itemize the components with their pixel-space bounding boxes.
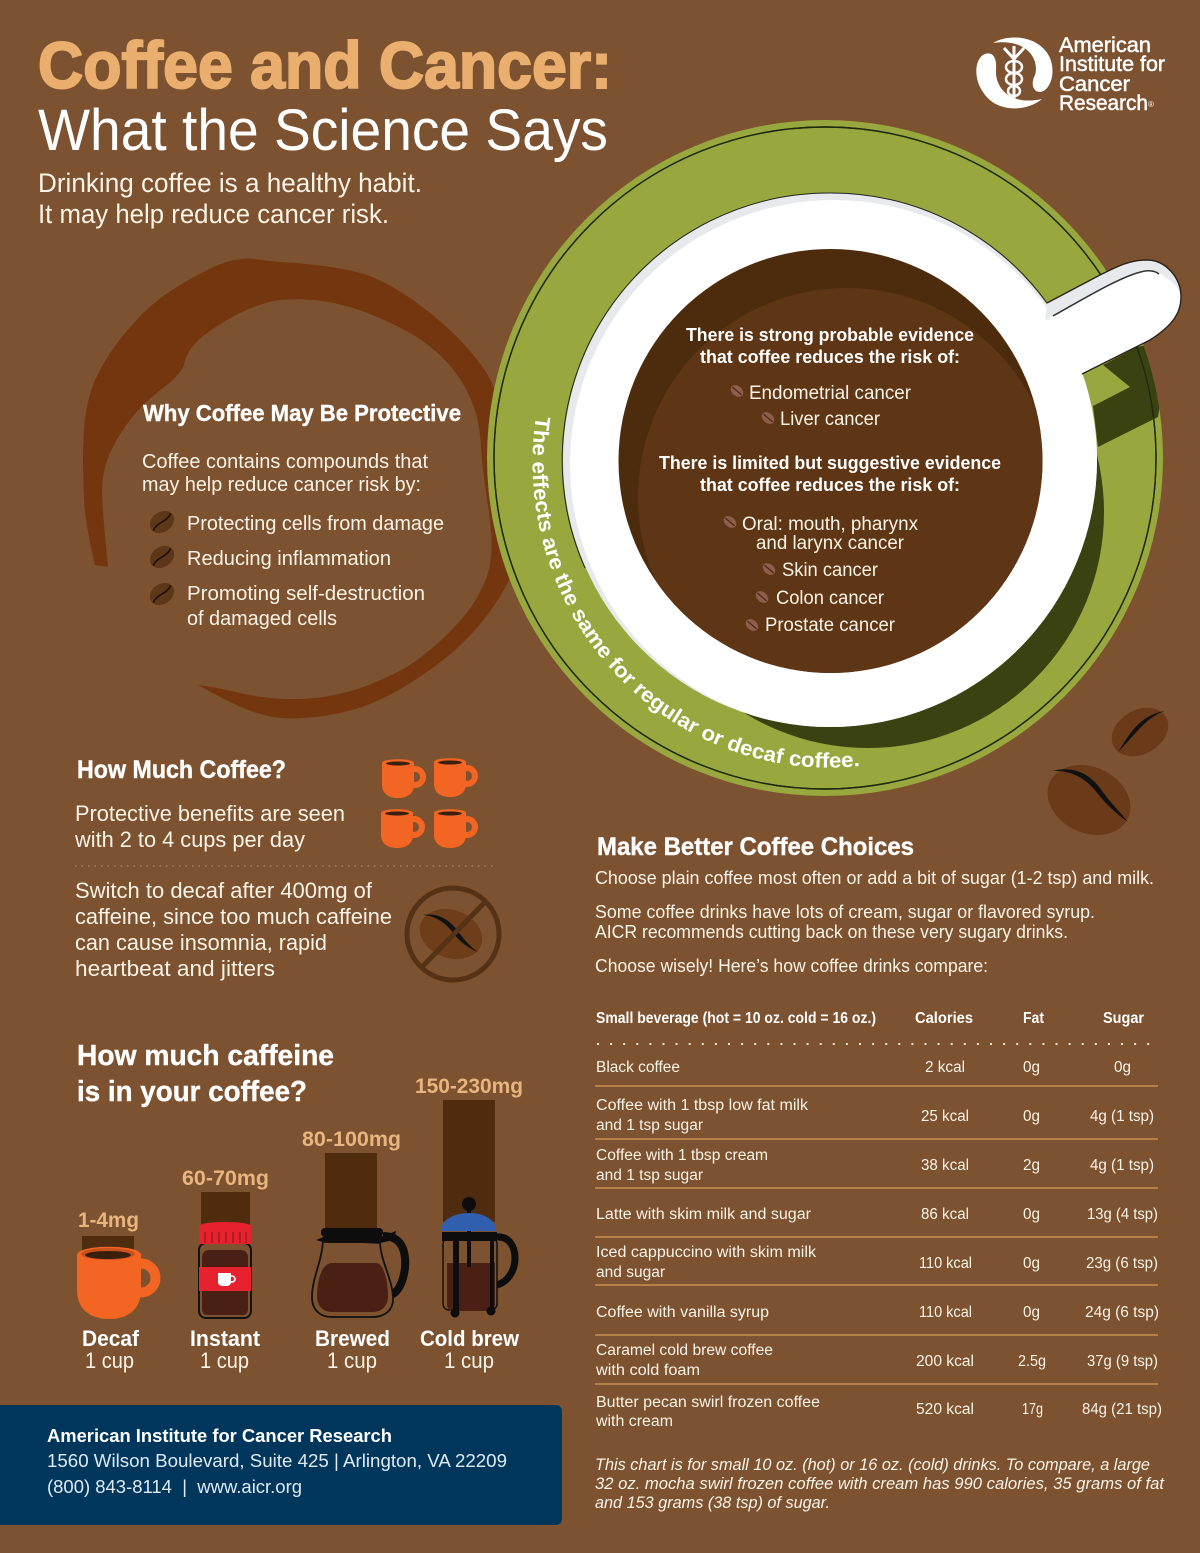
row: cream: 4g (1 tsp): [1090, 1157, 1154, 1174]
icon: decaf mug: [77, 1247, 156, 1319]
logo: American Institute for Cancer Research: American: [1059, 34, 1151, 57]
labels: drink names: Decaf: [82, 1326, 140, 1351]
title: What the Science Says: [38, 98, 608, 163]
row: black coffee: [596, 1059, 1131, 1076]
coffee surface: [618, 249, 1042, 673]
heading: limited evidence: [659, 452, 1001, 495]
row: caramel cold brew: with cold foam: [595, 1362, 700, 1379]
intro text: [38, 168, 422, 229]
text: advice: [595, 867, 1154, 976]
title: Coffee and Cancer:: [38, 28, 612, 102]
text: advice: Some coffee drinks have lots of cream, sugar or flavored syrup.: [595, 901, 1095, 922]
heading: strong evidence: [686, 324, 974, 367]
labels: drink names: 1 cup: [444, 1348, 494, 1373]
panel: why coffee may be protective: [142, 400, 461, 630]
logo: American Institute for Cancer Research: ®: [1148, 100, 1154, 109]
note: chart footnote: [595, 1456, 1165, 1512]
intro text: Drinking coffee is a healthy habit.: [38, 168, 422, 198]
text: advice: Choose wisely! Here’s how coffee drinks compare:: [595, 955, 988, 976]
heading: how much caffeine: is in your coffee?: [77, 1076, 307, 1108]
row: low fat milk: 0g: [1023, 1108, 1040, 1125]
bullet list: protective effects: Promoting self-destruction: [187, 582, 425, 605]
table: coffee drink comparison: [595, 1010, 1162, 1430]
icon: four orange mugs: [381, 758, 475, 848]
text: protective benefits: Protective benefits are seen: [75, 801, 345, 826]
title: [38, 28, 612, 163]
row: butter pecan: 520 kcal: [916, 1401, 974, 1418]
labels: drink names: 1 cup: [200, 1348, 249, 1373]
row: latte: [596, 1206, 1158, 1223]
intro text: It may help reduce cancer risk.: [38, 199, 389, 229]
list: strong evidence cancers: Endometrial cancer: [749, 383, 912, 404]
heading: limited evidence: There is limited but suggestive evidence: [659, 452, 1001, 473]
cup handle: [1030, 260, 1181, 380]
labels: drink names: 1 cup: [85, 1348, 134, 1373]
logo: American Institute for Cancer Research: Research: [1059, 92, 1148, 115]
row: iced cappuccino: Iced cappuccino with skim milk: [596, 1244, 816, 1261]
row: black coffee: 0g: [1114, 1059, 1131, 1076]
row: latte: 13g (4 tsp): [1087, 1206, 1158, 1223]
text: switch to decaf: Switch to decaf after 400mg of: [75, 878, 373, 903]
icon: instant coffee jar: [199, 1222, 251, 1318]
list: limited evidence cancers: Skin cancer: [782, 560, 879, 581]
bullet list: protective effects: of damaged cells: [187, 607, 337, 630]
labels: drink names: Brewed: [315, 1326, 390, 1351]
curved caption on saucer: The effects are the same for regular or decaf coffee.: [532, 418, 859, 768]
row: low fat milk: and 1 tsp sugar: [596, 1117, 703, 1134]
icon: no coffee bean: [407, 888, 499, 980]
list: limited evidence cancers: [721, 514, 918, 636]
bullet list: protective effects: Protecting cells from damage: [187, 512, 444, 535]
heading: strong evidence: There is strong probable evidence: [686, 324, 974, 345]
note: chart footnote: and 153 grams (38 tsp) of sugar.: [595, 1494, 830, 1512]
table header: Small beverage (hot = 10 oz. cold = 16 oz.): [596, 1010, 876, 1027]
row: vanilla syrup: Coffee with vanilla syrup: [596, 1304, 769, 1321]
caffeine amounts: 1-4mg: [78, 1209, 139, 1232]
table header: Sugar: [1103, 1010, 1144, 1027]
text: protective benefits: [74, 801, 345, 852]
row: iced cappuccino: 0g: [1023, 1255, 1040, 1272]
table header: [596, 1010, 1144, 1027]
list: limited evidence cancers: Oral: mouth, pharynx: [742, 514, 918, 535]
row: low fat milk: [596, 1097, 1154, 1134]
row: vanilla syrup: 24g (6 tsp): [1085, 1304, 1159, 1321]
text: advice: AICR recommends cutting back on these very sugary drinks.: [595, 921, 1068, 942]
row: butter pecan: Butter pecan swirl frozen coffee: [596, 1394, 820, 1411]
row: black coffee: Black coffee: [596, 1059, 680, 1076]
row: low fat milk: 25 kcal: [921, 1108, 969, 1125]
footer: contact panel: [0, 1405, 562, 1525]
intro text: compounds: [142, 450, 428, 496]
heading: better choices: Make Better Coffee Choices: [597, 833, 914, 861]
panel: evidence text in cup: [659, 324, 1001, 636]
cup shadow: [494, 127, 1170, 789]
labels: drink names: Instant: [190, 1326, 261, 1351]
row: black coffee: 0g: [1023, 1059, 1040, 1076]
icon: brewed carafe: [312, 1228, 405, 1317]
row: butter pecan: with cream: [595, 1413, 673, 1430]
heading: why coffee: Why Coffee May Be Protective: [143, 400, 461, 426]
bullet list: protective effects: Reducing inflammation: [187, 547, 391, 570]
labels: drink names: Cold brew: [420, 1326, 520, 1351]
row: cream: 38 kcal: [921, 1157, 969, 1174]
table header: Fat: [1023, 1010, 1044, 1027]
row: latte: 86 kcal: [921, 1206, 969, 1223]
intro text: compounds: may help reduce cancer risk by:: [142, 473, 421, 496]
icon: coffee beans: [1036, 698, 1177, 848]
caffeine bars: [82, 1100, 495, 1252]
row: caramel cold brew: [595, 1342, 1158, 1379]
text: advice: Choose plain coffee most often or add a bit of sugar (1-2 tsp) and milk.: [595, 867, 1154, 888]
text: switch to decaf: caffeine, since too much caffeine: [75, 904, 392, 929]
note: chart footnote: This chart is for small 10 oz. (hot) or 16 oz. (cold) drinks. To compare, a large: [595, 1456, 1150, 1474]
footer: contact panel: (800) 843-8114 | www.aicr.org: [47, 1477, 302, 1497]
coffee cup: [562, 193, 1181, 728]
caffeine amounts: 80-100mg: [302, 1128, 401, 1151]
table header: Calories: [915, 1010, 973, 1027]
row: cream: 2g: [1023, 1157, 1040, 1174]
heading: how much coffee: How Much Coffee?: [77, 756, 286, 784]
panel: make better coffee choices: [595, 833, 1165, 1512]
row: caramel cold brew: 37g (9 tsp): [1087, 1353, 1158, 1370]
row: iced cappuccino: 23g (6 tsp): [1086, 1255, 1158, 1272]
row: cream: and 1 tsp sugar: [596, 1167, 703, 1184]
row: caramel cold brew: 2.5g: [1018, 1353, 1046, 1370]
text: protective benefits: with 2 to 4 cups per day: [74, 827, 305, 852]
heading: how much caffeine: How much caffeine: [77, 1040, 334, 1072]
row: vanilla syrup: 110 kcal: [919, 1304, 972, 1321]
row: cream: [596, 1147, 1154, 1184]
row: caramel cold brew: Caramel cold brew coffee: [596, 1342, 773, 1359]
note: chart footnote: 32 oz. mocha swirl frozen coffee with cream has 990 calories, 35 grams of fat: [595, 1475, 1165, 1493]
list: limited evidence cancers: Colon cancer: [776, 588, 885, 609]
row: iced cappuccino: [596, 1244, 1158, 1281]
text: switch to decaf: can cause insomnia, rapid: [75, 930, 327, 955]
footer: contact panel: American Institute for Cancer Research: [47, 1426, 392, 1446]
row: latte: Latte with skim milk and sugar: [596, 1206, 811, 1223]
text: switch to decaf: heartbeat and jitters: [75, 956, 275, 981]
row: black coffee: 2 kcal: [925, 1059, 965, 1076]
icon: french press: [441, 1197, 515, 1318]
caffeine amounts: 150-230mg: [415, 1075, 523, 1098]
row: cream: Coffee with 1 tbsp cream: [596, 1147, 768, 1164]
intro text: compounds: Coffee contains compounds that: [142, 450, 428, 473]
panel: how much coffee: [74, 756, 499, 981]
list: limited evidence cancers: and larynx cancer: [756, 533, 905, 554]
list: limited evidence cancers: Prostate cancer: [765, 615, 896, 636]
row: caramel cold brew: 200 kcal: [916, 1353, 974, 1370]
caffeine amounts: 60-70mg: [182, 1167, 269, 1190]
row: butter pecan: 17g: [1022, 1401, 1043, 1418]
list: strong evidence cancers: [728, 383, 912, 430]
row: latte: 0g: [1023, 1206, 1040, 1223]
labels: drink names: [82, 1326, 520, 1373]
coffee stain ring: [83, 259, 527, 718]
row: iced cappuccino: 110 kcal: [919, 1255, 972, 1272]
row: vanilla syrup: [596, 1304, 1159, 1321]
saucer: [487, 120, 1163, 796]
logo: American Institute for Cancer Research: [976, 34, 1165, 115]
list: strong evidence cancers: Liver cancer: [780, 409, 881, 430]
caffeine amounts: [78, 1075, 523, 1232]
row: iced cappuccino: and sugar: [596, 1264, 665, 1281]
bullet list: protective effects: [146, 506, 444, 630]
logo: American Institute for Cancer Research: Cancer: [1059, 73, 1130, 96]
row: butter pecan: 84g (21 tsp): [1082, 1401, 1162, 1418]
panel: caffeine comparison: [77, 1040, 523, 1373]
heading: how much caffeine: [77, 1040, 334, 1108]
heading: limited evidence: that coffee reduces the risk of:: [700, 474, 960, 495]
logo: American Institute for Cancer Research: Institute for: [1059, 53, 1165, 76]
row: low fat milk: Coffee with 1 tbsp low fat milk: [596, 1097, 808, 1114]
text: switch to decaf: [75, 878, 392, 981]
heading: strong evidence: that coffee reduces the risk of:: [700, 346, 960, 367]
row: low fat milk: 4g (1 tsp): [1090, 1108, 1154, 1125]
footer: contact panel: 1560 Wilson Boulevard, Suite 425 | Arlington, VA 22209: [47, 1451, 507, 1471]
row: vanilla syrup: 0g: [1023, 1304, 1040, 1321]
labels: drink names: 1 cup: [327, 1348, 377, 1373]
row: butter pecan: [595, 1394, 1162, 1430]
